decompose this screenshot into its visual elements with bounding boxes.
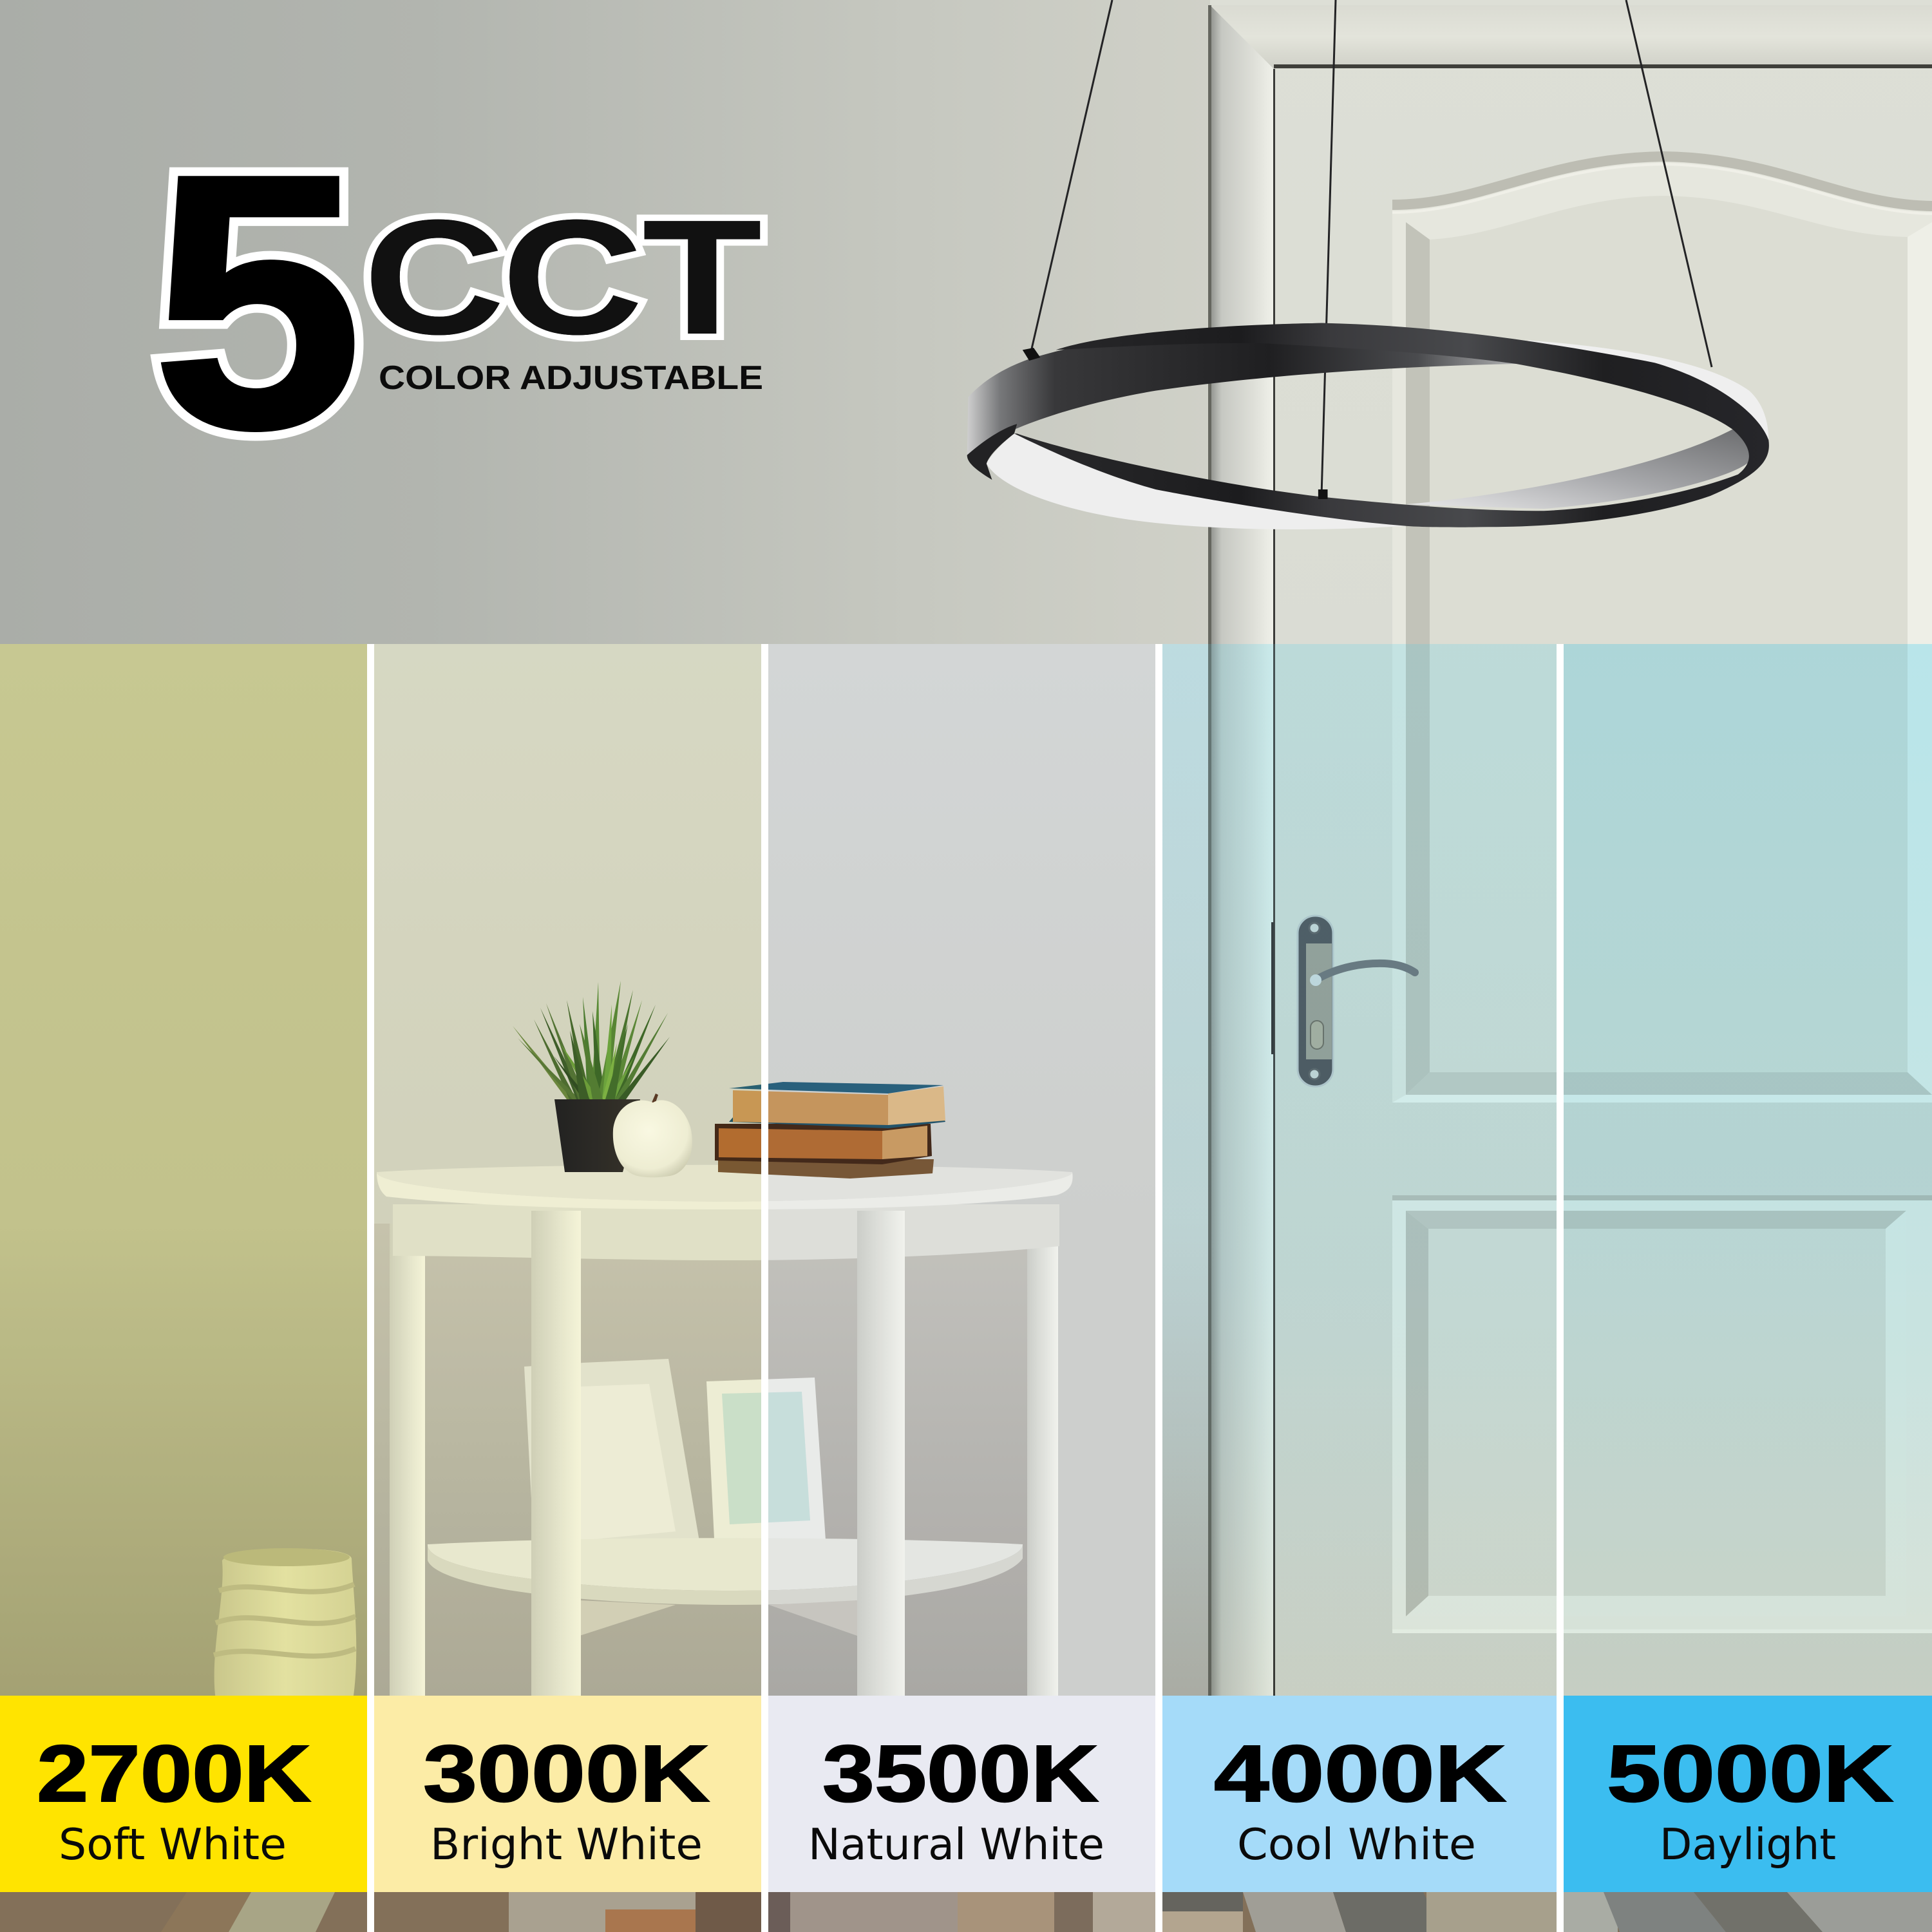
label: 3000K Bright White: 3000K: [423, 1729, 710, 1819]
label: 4000K Cool White: 4000K: [1214, 1729, 1506, 1819]
label: 4000K Cool White: Cool White: [1237, 1819, 1476, 1870]
door upper panel: [1392, 156, 1932, 1103]
door handle: [1271, 916, 1415, 1086]
label: 3000K Bright White: Bright White: [430, 1819, 703, 1870]
tint: 5000K: [1564, 644, 1932, 1700]
door frame jamb: [1210, 5, 1274, 1700]
shelf: [428, 1538, 1023, 1636]
label: 3500K Natural White: 3500K: [822, 1729, 1099, 1819]
label: 2700K Soft White: [0, 1696, 367, 1892]
letters CCT: CCT: [363, 186, 762, 368]
rear table legs: [390, 1224, 1058, 1696]
label: 3500K Natural White: Natural White: [808, 1819, 1104, 1870]
wood floor: [0, 1892, 1932, 1932]
picture frame small: [706, 1378, 827, 1565]
tint: 3500K: [768, 644, 1155, 1700]
label: 4000K Cool White: [1162, 1696, 1557, 1892]
label: 5000K Daylight: [1564, 1696, 1932, 1892]
door frame head: [1210, 5, 1932, 69]
ring left dark strip: [967, 424, 1017, 480]
label: 5000K Daylight: 5000K: [1607, 1729, 1893, 1819]
plant pot: [554, 1099, 640, 1172]
tint: 2700K: [0, 644, 367, 1700]
table top: [377, 1165, 1073, 1209]
letters CCT: CCT: [363, 186, 762, 368]
table apron: [393, 1204, 1059, 1260]
ring white diffuser lower left: [987, 433, 1405, 529]
door lower panel: [1392, 1195, 1932, 1633]
ring wide dark band: [967, 323, 1516, 455]
top wall background: [0, 0, 1217, 644]
lower wall background: [0, 644, 1217, 1696]
pendant ring light: [967, 323, 1769, 529]
subtitle: COLOR ADJUSTABLE: [379, 359, 763, 397]
numeral 5: 5: [152, 100, 363, 503]
vase: [214, 1548, 356, 1700]
front table legs: [531, 1211, 905, 1696]
label: 2700K Soft White: 2700K: [37, 1729, 311, 1819]
numeral 5: 5: [152, 100, 363, 503]
blue glow over cool bands: [1162, 644, 1932, 1700]
ring white diffuser upper right: [1528, 340, 1768, 440]
tint: 3000K: [374, 644, 761, 1700]
ring inner gray surface right: [1405, 430, 1751, 509]
centre wire clamp: [1318, 489, 1328, 499]
table recess shadow: [374, 1224, 1058, 1696]
heading: 5 CCT color adjustable: [152, 100, 763, 503]
label: 3000K Bright White: [374, 1696, 761, 1892]
table with shelf, frames and objects: [374, 981, 1162, 1696]
hanging wires: [1030, 0, 1712, 496]
ring thin band: [1014, 323, 1769, 527]
books: [715, 1082, 945, 1179]
tint: 4000K: [1162, 644, 1557, 1700]
door and frame: [1208, 0, 1932, 1700]
colour temperature tints: [0, 644, 1932, 1700]
label: 3500K Natural White: [768, 1696, 1155, 1892]
apple: [613, 1094, 692, 1177]
picture frame large: [524, 1359, 701, 1569]
label: 2700K Soft White: Soft White: [59, 1819, 287, 1870]
left wire clamp: [1023, 348, 1040, 361]
plant: [513, 981, 670, 1099]
label: 5000K Daylight: Daylight: [1660, 1819, 1836, 1870]
